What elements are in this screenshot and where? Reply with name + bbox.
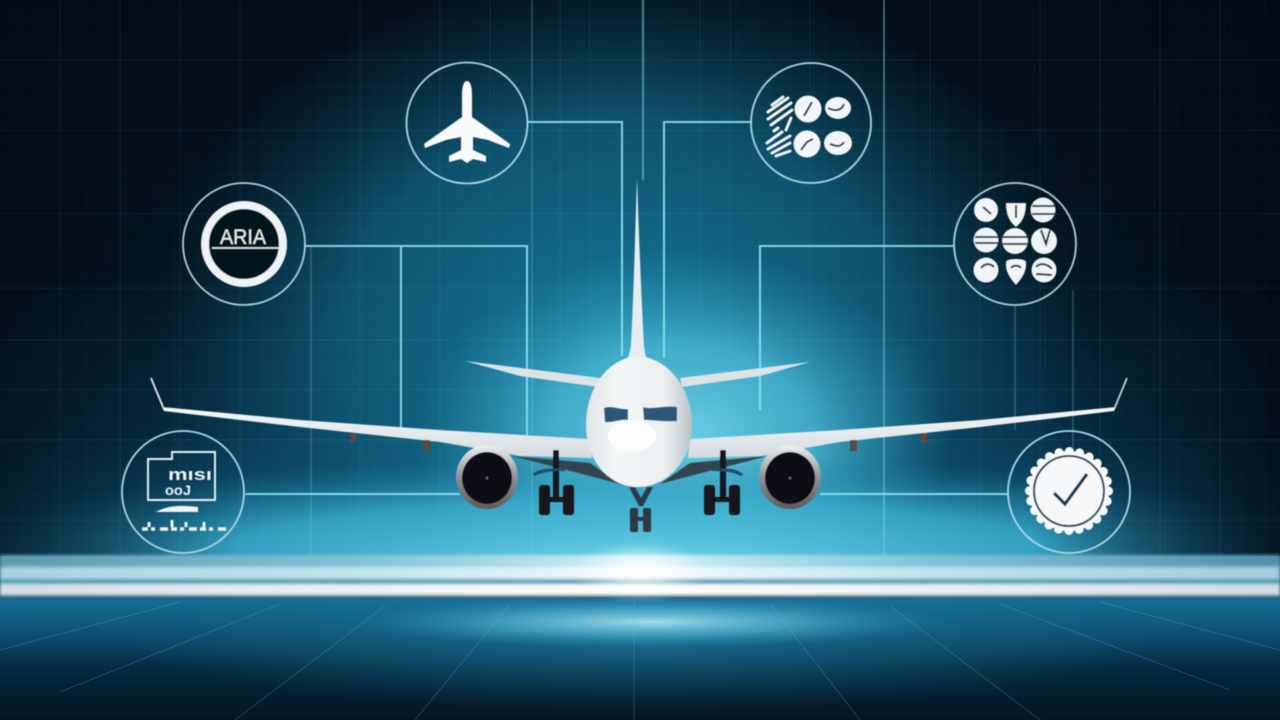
connector: ARIA icon: [305, 246, 527, 440]
monitor text: mısı: [168, 465, 212, 484]
vertical tail fin: [626, 178, 648, 360]
horizon light band: [0, 542, 1280, 602]
icon: monitor with data in circle: [122, 431, 244, 553]
cockpit windows: [604, 407, 677, 422]
flap track fairings: [350, 433, 927, 451]
horizontal stabilizers: [465, 361, 810, 387]
connector: badge grid icon: [760, 246, 954, 410]
connector lines: [245, 122, 1008, 494]
nose gear: [629, 487, 653, 532]
striped symbols: [767, 97, 792, 156]
left engine: [456, 445, 518, 509]
airplane, front view: [151, 178, 1127, 532]
connector: certification icon: [820, 493, 1008, 495]
background grid: [0, 0, 1280, 560]
left wing: [162, 407, 592, 458]
icon: certification check badge in circle: [1008, 431, 1130, 553]
left winglet: [151, 378, 163, 407]
icon: airplane in circle: [406, 62, 528, 184]
fuselage nose: [586, 356, 692, 487]
left main gear: [533, 450, 574, 515]
connector: top right icon to fuselage: [664, 122, 751, 358]
icon: ARIA ring logo in circle: [183, 183, 305, 305]
connector: monitor icon: [245, 493, 460, 495]
icon: nine-badge grid in circle: [954, 183, 1076, 305]
connector: airplane icon to fuselage: [527, 122, 622, 356]
right engine: [759, 445, 821, 509]
logo text: ARIA: [220, 226, 266, 249]
right main gear: [704, 450, 743, 515]
wing fairing shadows: [512, 456, 768, 484]
right winglet: [1115, 378, 1127, 407]
nose highlight: [608, 420, 656, 452]
monitor sub text: ooJ: [165, 482, 191, 498]
icon: six-symbol grid in circle: [751, 63, 871, 183]
runway floor: [0, 570, 1280, 720]
right wing: [688, 407, 1116, 458]
